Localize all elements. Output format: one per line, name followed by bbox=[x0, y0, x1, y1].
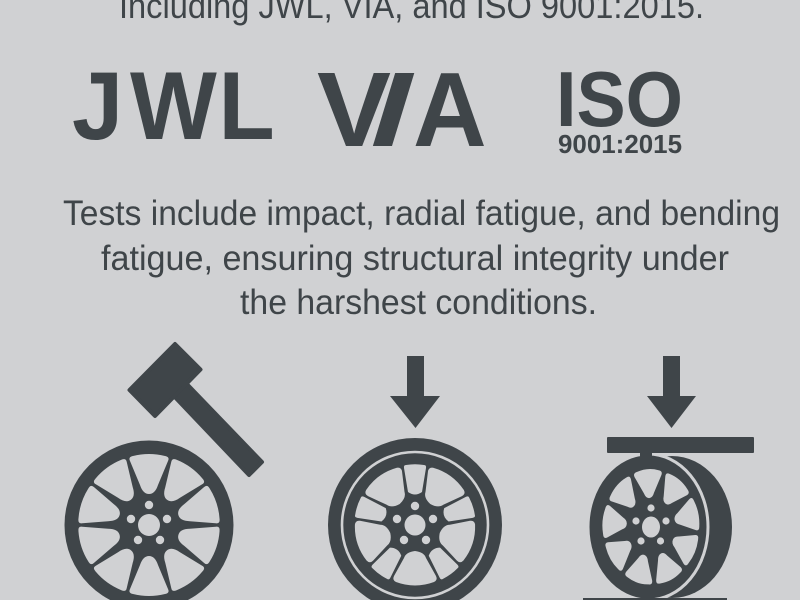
description text block: Tests include impact, radial fatigue, and bending bbox=[63, 194, 780, 233]
press plate, top bbox=[607, 437, 754, 453]
logo: JWL: W bbox=[130, 52, 217, 159]
icon: radial fatigue test, arrow over wheel bbox=[328, 356, 502, 600]
icon: impact test, hammer over wheel bbox=[64, 344, 262, 600]
support plate, bottom bbox=[583, 598, 727, 600]
description text block: fatigue, ensuring structural integrity under bbox=[101, 239, 729, 278]
logo: ISO 9001:2015: ISO bbox=[556, 55, 683, 143]
arrow: downward load bbox=[390, 356, 440, 428]
icon: bending fatigue test, press over wheel bbox=[583, 356, 754, 600]
icon: hammer bbox=[130, 344, 262, 475]
logo: VIA: I bbox=[357, 50, 430, 169]
logo: JWL: L bbox=[218, 52, 275, 159]
description text block bbox=[63, 194, 780, 322]
logo: VIA: V bbox=[317, 51, 391, 169]
logo: VIA: A bbox=[413, 51, 487, 169]
logo: VIA bbox=[317, 50, 487, 169]
arrow: downward press bbox=[647, 356, 696, 428]
description text block: the harshest conditions. bbox=[240, 283, 597, 322]
logo: ISO 9001:2015: 9001:2015 bbox=[558, 131, 682, 159]
certification logos bbox=[72, 50, 683, 169]
icon: wheel with tire bbox=[328, 438, 502, 600]
logo: JWL: J bbox=[72, 52, 123, 159]
icon: wheel seen at an angle bbox=[588, 450, 732, 600]
icon: wheel with ten spokes bbox=[64, 440, 234, 600]
